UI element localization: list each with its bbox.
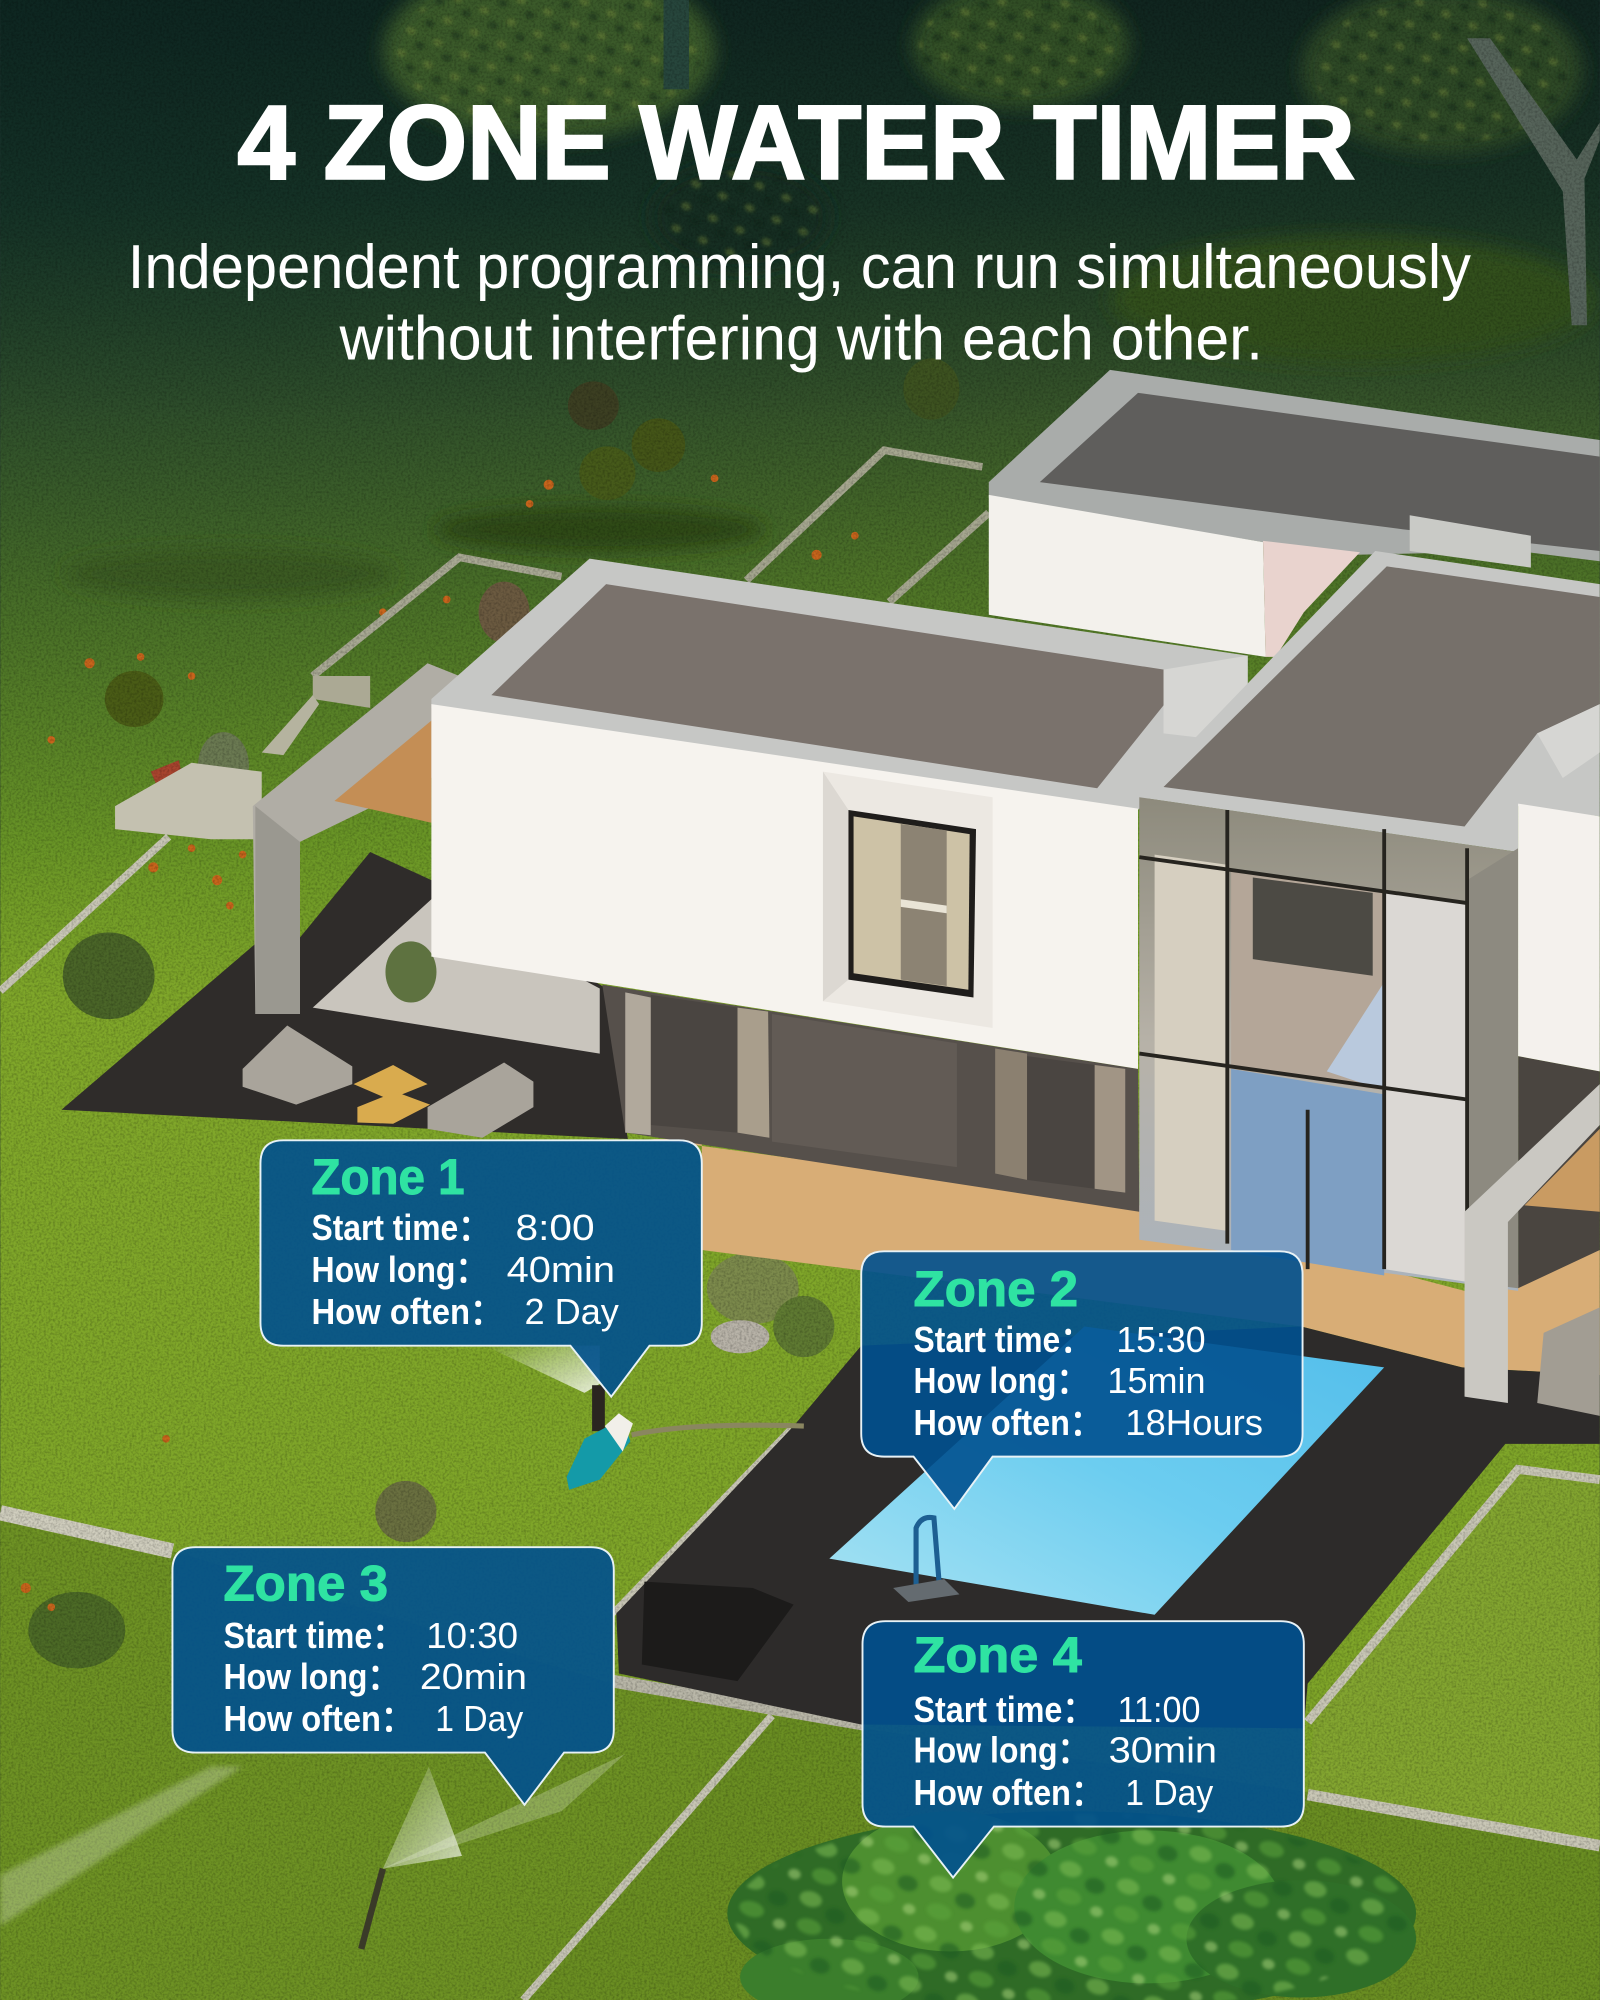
- bush: [727, 1811, 1416, 2000]
- subtitle: Independent programming, can run simultaneously: [128, 232, 1472, 302]
- callout: zone 2: 18Hours: [1125, 1403, 1263, 1443]
- callout: zone 2: 15:30: [1116, 1320, 1206, 1360]
- callout: zone 1: How long：: [311, 1250, 487, 1290]
- garden paths: [0, 450, 1600, 2000]
- callout: zone 2: How long：: [914, 1361, 1088, 1401]
- callout: zone 3: How often：: [223, 1699, 414, 1739]
- callout: zone 3: [172, 1547, 614, 1805]
- callout: zone 4: Zone 4: [914, 1627, 1082, 1683]
- wooden deck: [651, 1139, 1600, 1375]
- callout: zone 4: 11:00: [1118, 1690, 1201, 1730]
- callout: zone 4: 1 Day: [1125, 1773, 1213, 1813]
- callout: zone 2: 15min: [1107, 1361, 1206, 1401]
- left pergola: [253, 663, 459, 1014]
- callout: zone 3: 1 Day: [435, 1699, 523, 1739]
- callout: zone 3: How long：: [223, 1657, 399, 1697]
- planter left: [115, 676, 370, 839]
- callout: zone 1: Zone 1: [311, 1149, 465, 1205]
- shrubs and flowers: [21, 358, 959, 1668]
- callout: zone 3: Zone 3: [223, 1556, 388, 1612]
- callout: zone 3: 10:30: [426, 1616, 518, 1656]
- callout: zone 1: 40min: [507, 1250, 615, 1290]
- left patio: [61, 852, 628, 1139]
- background trees: [64, 0, 1595, 599]
- sprinkler and hose zone 1: [567, 1385, 804, 1490]
- title: 4 ZONE WATER TIMER: [237, 85, 1355, 202]
- callout: zone 2: How often：: [914, 1403, 1102, 1443]
- main house white wall: [431, 704, 1138, 1069]
- callout: zone 2: Start time：: [914, 1320, 1092, 1360]
- callout: zone 2: Zone 2: [914, 1261, 1078, 1317]
- callout: zone 4: [862, 1621, 1304, 1878]
- callout: zone 1: [260, 1140, 702, 1397]
- callout: zone 1: 8:00: [516, 1208, 595, 1248]
- sprinkler spray zone 1: [485, 1346, 600, 1393]
- callout: zone 1: Start time：: [311, 1208, 490, 1248]
- callout: zone 4: How often：: [914, 1773, 1104, 1813]
- subtitle: [128, 232, 1472, 374]
- right pergola: [1465, 1084, 1600, 1416]
- callout: zone 2: [861, 1251, 1303, 1509]
- callout: zone 4: Start time：: [914, 1690, 1095, 1730]
- callout: zone 4: How long：: [914, 1731, 1090, 1771]
- ground floor cladding: [602, 985, 1139, 1212]
- sprinkler spray bottom: [0, 1754, 625, 1949]
- tree trunks: [664, 0, 1600, 325]
- callout: zone 3: 20min: [420, 1657, 527, 1697]
- callout: zone 3: Start time：: [223, 1616, 405, 1656]
- glass facade: [1139, 797, 1518, 1291]
- right white wall: [1518, 804, 1600, 1071]
- right cladding: [1518, 1056, 1600, 1288]
- pool: [829, 1327, 1384, 1615]
- right block roof: [1138, 551, 1600, 852]
- upper building: [989, 370, 1600, 657]
- subtitle: without interfering with each other.: [339, 304, 1263, 374]
- callout: zone 4: 30min: [1109, 1731, 1217, 1771]
- callout: zone 1: 2 Day: [524, 1292, 619, 1332]
- patio furniture: [243, 1026, 533, 1138]
- dark terrace: [616, 1327, 1600, 1728]
- window: [848, 810, 976, 997]
- main house roof: [431, 559, 1248, 810]
- callout: zone 1: How often：: [311, 1292, 503, 1332]
